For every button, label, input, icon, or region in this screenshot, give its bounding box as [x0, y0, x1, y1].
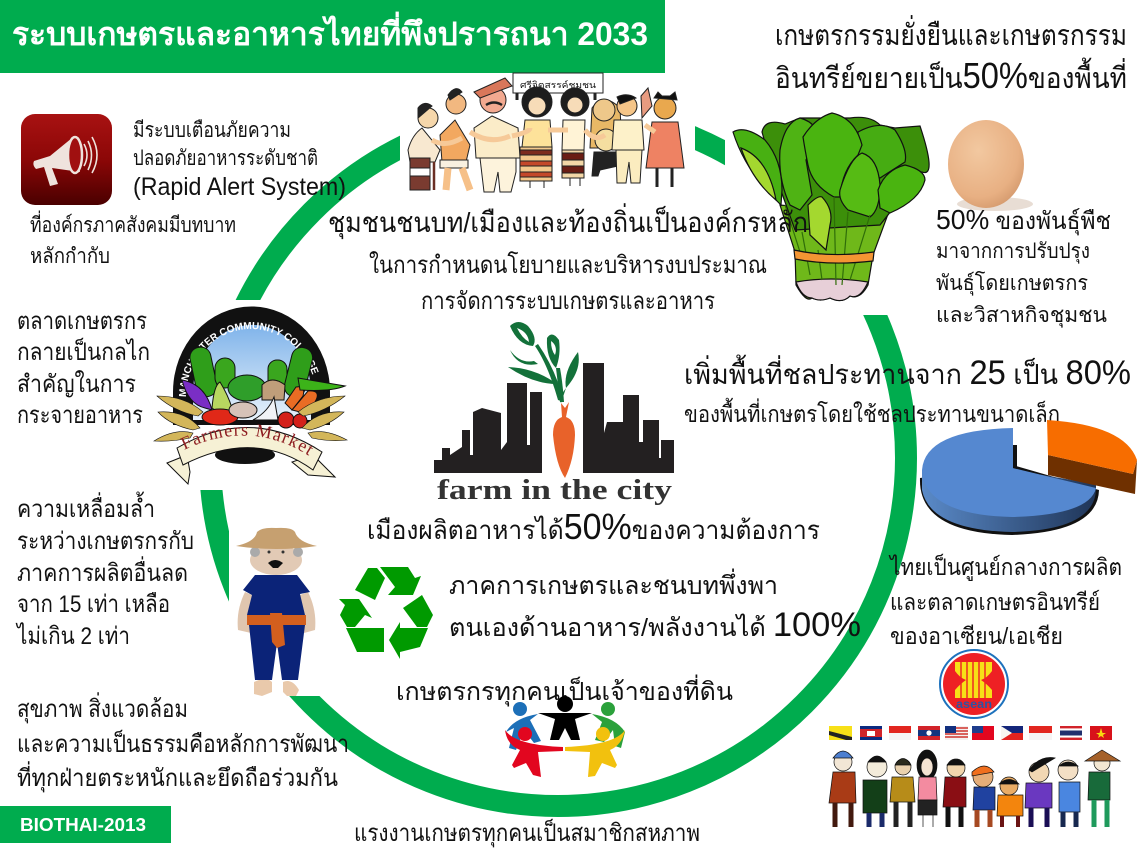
text: thailand as hub: และตลาดเกษตรอินทรีย์ [890, 589, 1100, 615]
figure 4 [520, 87, 552, 188]
text: thailand as hub: ของอาเซียน/เอเชีย [890, 623, 1063, 649]
text: thailand as hub: ไทยเป็นศูนย์กลางการผลิต [888, 552, 1122, 581]
text: seed varieties: พันธุ์โดยเกษตรกร [936, 271, 1088, 296]
person 7 [997, 777, 1023, 827]
logo: farm in the city [434, 322, 674, 506]
text: rapid alert system: มีระบบเตือนภัยความ [133, 119, 291, 142]
text: farmers market: ตลาดเกษตรกร [17, 308, 147, 335]
text: health environment justice [17, 692, 349, 793]
logo: farmers market: MANCHESTER COMMUNITY COLLEGE [179, 322, 319, 396]
text: community organisations: การจัดการระบบเกษตรและอาหาร [421, 288, 715, 315]
text: rapid alert system: หลักกำกับ [30, 245, 110, 268]
text: irrigation: ของพื้นที่เกษตรโดยใช้ชลประทานขนาดเล็ก [684, 398, 1060, 427]
figure 1 [408, 103, 440, 190]
icon: megaphone alert [21, 114, 112, 205]
figure 8 [641, 88, 684, 187]
text: community organisations: ในการกำหนดนโยบายและบริหารงบประมาณ [369, 251, 767, 279]
text: health environment justice: และความเป็นธรรมคือหลักการพัฒนา [17, 729, 349, 758]
person 8 [1025, 758, 1055, 827]
text: rapid alert system: ปลอดภัยอาหารระดับชาติ [133, 147, 318, 170]
text: inequality: จาก 15 เท่า เหลือ [17, 591, 170, 618]
text: irrigation [684, 354, 1131, 427]
figure 3 [474, 78, 520, 192]
text: rapid alert system: (Rapid Alert System) [133, 173, 346, 201]
text: farmers market: สำคัญในการ [17, 370, 136, 398]
text: rapid alert system [30, 119, 346, 268]
logo: farmers market: Farmers Market [180, 424, 313, 456]
person 1 [829, 751, 856, 827]
figure 7 [612, 95, 644, 183]
figure 6 [590, 99, 622, 176]
logo: farmers market [153, 306, 348, 485]
green circular ring [210, 110, 906, 806]
text: thailand as hub [888, 552, 1122, 649]
illustration: community people cartoon [408, 73, 684, 192]
title banner [0, 0, 665, 73]
text: health environment justice: ที่ทุกฝ่ายตระหนักและยึดถือร่วมกัน [17, 761, 338, 793]
text: community organisations [328, 203, 808, 315]
carrot [553, 402, 575, 478]
text: health environment justice: สุขภาพ สิ่งแวดล้อม [17, 692, 188, 724]
placard [513, 73, 603, 100]
text: inequality: ไม่เกิน 2 เท่า [15, 622, 130, 650]
text: labour union: แรงงานเกษตรทุกคนเป็นสมาชิกสหภาพ [354, 818, 700, 848]
text: inequality: ระหว่างเกษตรกรกับ [17, 528, 194, 555]
illustration: spinach bunch [733, 113, 929, 301]
title banner: ระบบเกษตรและอาหารไทยที่พึงปรารถนา 2033 [12, 11, 648, 52]
icon: recycling arrows [339, 567, 433, 659]
text: farmers market [17, 308, 150, 429]
person 3 [890, 758, 915, 827]
figure 2 [440, 89, 470, 190]
illustration: ASEAN people holding hands [829, 750, 1120, 827]
logo: ASEAN [940, 650, 1008, 718]
person 5 [943, 759, 966, 827]
illustration: farmer [236, 528, 317, 696]
illustration: egg [948, 120, 1033, 211]
text: seed varieties: 50% ของพันธุ์พืช [936, 204, 1111, 236]
text: community organisations: ชุมชนชนบท/เมืองและท้องถิ่นเป็นองค์กรหลัก [328, 203, 808, 240]
person 6 [972, 766, 995, 827]
text: rapid alert system: ที่องค์กรภาคสังคมมีบทบาท [30, 210, 236, 237]
text: farmers market: กลายเป็นกลไก [17, 337, 150, 366]
figure 5 [561, 88, 589, 186]
badge: BIOTHAI-2013: BIOTHAI-2013 [20, 815, 146, 835]
logo: farm in the city: farm in the city [437, 474, 673, 506]
placard: ศรีจิตสรรค์ชุมชน [520, 79, 596, 91]
person 10 [1085, 750, 1120, 827]
person 4 [917, 750, 937, 827]
badge: BIOTHAI-2013 [0, 806, 171, 843]
text: seed varieties: มาจากการปรับปรุง [936, 240, 1090, 264]
logo: ASEAN: asean [956, 697, 992, 711]
heading: sustainable farming 50% [775, 15, 1127, 96]
text: seed varieties [936, 204, 1111, 328]
heading: sustainable farming 50%: อินทรีย์ขยายเป็น50%ของพื้นที่ [775, 55, 1127, 96]
text: self-reliance: ตนเองด้านอาหาร/พลังงานได้ 100% [449, 606, 861, 644]
text: inequality [15, 491, 194, 650]
text: inequality: ภาคการผลิตอื่นลด [17, 556, 188, 587]
text: farmers market: กระจายอาหาร [17, 402, 143, 429]
text: seed varieties: และวิสาหกิจชุมชน [936, 304, 1107, 328]
text: irrigation: เพิ่มพื้นที่ชลประทานจาก 25 เป็น 80% [684, 354, 1131, 392]
carrot leaves [508, 322, 579, 403]
text: self-reliance [449, 568, 861, 644]
person 2 [863, 756, 887, 827]
flags of ASEAN [829, 726, 1112, 740]
person 9 [1058, 760, 1080, 827]
text: land ownership: เกษตรกรทุกคนเป็นเจ้าของที่ดิน [396, 674, 733, 707]
text: inequality: ความเหลื่อมล้ำ [17, 491, 155, 523]
icon: people circle [505, 696, 625, 777]
text: city food production: เมืองผลิตอาหารได้50%ของความต้องการ [367, 506, 820, 547]
linked arms [432, 125, 655, 144]
chart: 3D pie [920, 420, 1137, 535]
text: self-reliance: ภาคการเกษตรและชนบทพึ่งพา [449, 568, 778, 600]
